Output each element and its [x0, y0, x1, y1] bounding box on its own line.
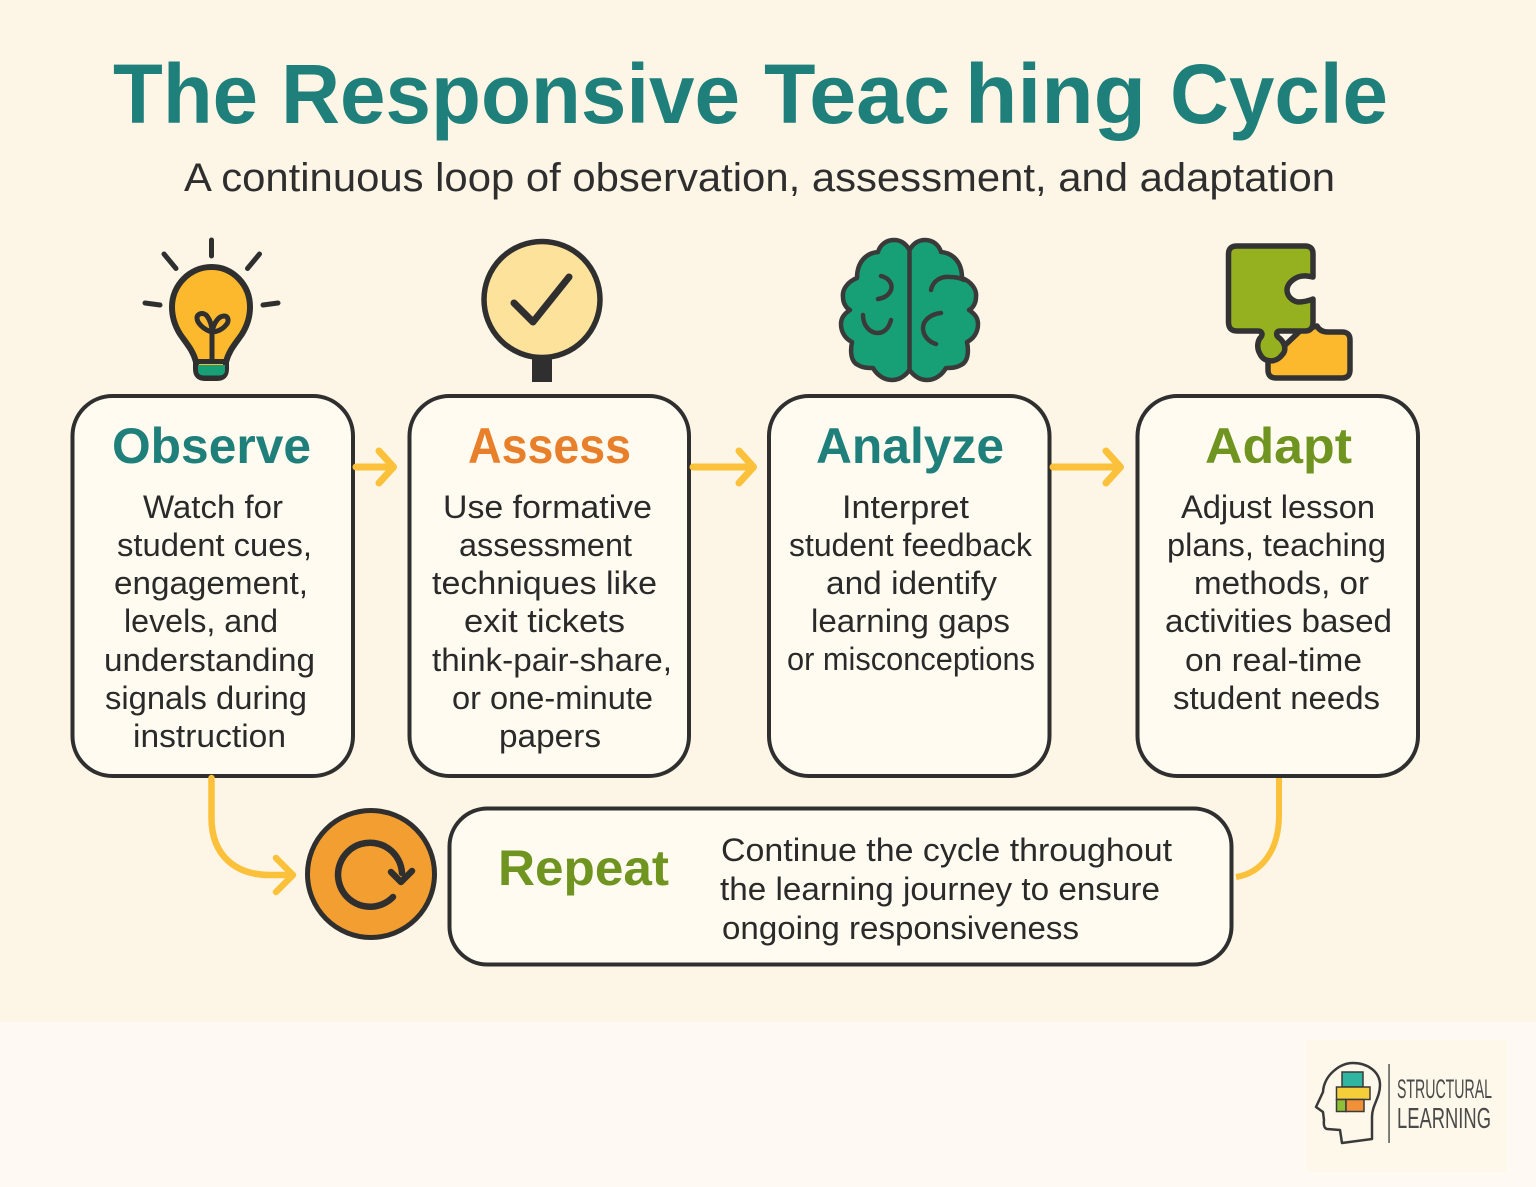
title: Responsive — [281, 47, 740, 141]
icon: check mark — [484, 242, 600, 382]
arrow: observe down to repeat icon — [212, 778, 293, 892]
text: assess description: Use formative — [443, 489, 652, 525]
heading: analyze: Analyze — [816, 418, 1004, 474]
text: observe description: student cues, — [117, 527, 312, 563]
text: analyze description: student feedback — [789, 527, 1033, 563]
arrow: assess to analyze — [693, 451, 754, 483]
text: adapt description — [1165, 489, 1392, 716]
text: repeat description: Continue the cycle throughout — [721, 832, 1172, 868]
text: adapt description: Adjust lesson — [1181, 489, 1375, 525]
text: observe description: understanding — [104, 642, 315, 678]
text: observe description: Watch for — [143, 489, 283, 525]
text: observe description: levels, and — [124, 603, 278, 639]
text: repeat description — [720, 832, 1172, 946]
text: observe description: signals during — [105, 680, 307, 716]
icon: light bulb — [145, 240, 278, 378]
text: analyze description: learning gaps — [811, 603, 1010, 639]
panel: observe — [72, 396, 353, 776]
heading: repeat: Repeat — [498, 840, 669, 896]
text: analyze description — [787, 489, 1035, 677]
icon: repeat circle — [308, 810, 434, 938]
title: Cycle — [1170, 47, 1388, 141]
text: adapt description: plans, teaching — [1167, 527, 1386, 563]
text: observe description: instruction — [133, 718, 286, 754]
arrow: observe to assess — [356, 451, 394, 483]
heading: assess: Assess — [468, 418, 631, 474]
panel: analyze — [769, 396, 1050, 776]
heading: adapt: Adapt — [1205, 418, 1352, 474]
text: analyze description: Interpret — [842, 489, 969, 525]
logo icon: head with blocks — [1316, 1063, 1380, 1143]
title — [113, 47, 1388, 141]
text: assess description: think-pair-share, — [432, 642, 672, 678]
text: observe description: engagement, — [114, 565, 308, 601]
text: assess description: assessment — [459, 527, 632, 563]
text: assess description — [432, 489, 672, 754]
text: observe description — [104, 489, 315, 754]
text: repeat description: the learning journey to ensure — [720, 871, 1160, 907]
arrow: analyze to adapt — [1053, 451, 1120, 483]
text: adapt description: methods, or — [1194, 565, 1369, 601]
text: adapt description: activities based — [1165, 603, 1392, 639]
title: Teac — [764, 47, 950, 141]
subtitle: A continuous loop of observation, assessment, and adaptation — [184, 156, 1335, 200]
title: hing — [965, 47, 1146, 141]
panel: assess — [410, 396, 689, 776]
heading: observe: Observe — [112, 418, 311, 474]
text: adapt description: on real-time — [1185, 642, 1362, 678]
text: assess description: techniques like — [432, 565, 657, 601]
arrow: adapt down to repeat — [1236, 778, 1279, 877]
text: repeat description: ongoing responsiveness — [722, 910, 1079, 946]
panel: adapt — [1138, 396, 1418, 776]
text: adapt description: student needs — [1173, 680, 1380, 716]
logo wordmark — [1397, 1074, 1492, 1135]
text: analyze description: or misconceptions — [787, 641, 1035, 677]
panel: repeat — [450, 808, 1232, 964]
icon: brain — [841, 240, 978, 380]
logo: structural learning — [1307, 1040, 1506, 1172]
icon: puzzle pieces — [1228, 246, 1350, 378]
text: assess description: papers — [499, 718, 601, 754]
text: assess description: or one-minute — [452, 680, 653, 716]
title: The — [113, 47, 258, 141]
text: assess description: exit tickets — [464, 603, 625, 639]
text: analyze description: and identify — [826, 565, 997, 601]
